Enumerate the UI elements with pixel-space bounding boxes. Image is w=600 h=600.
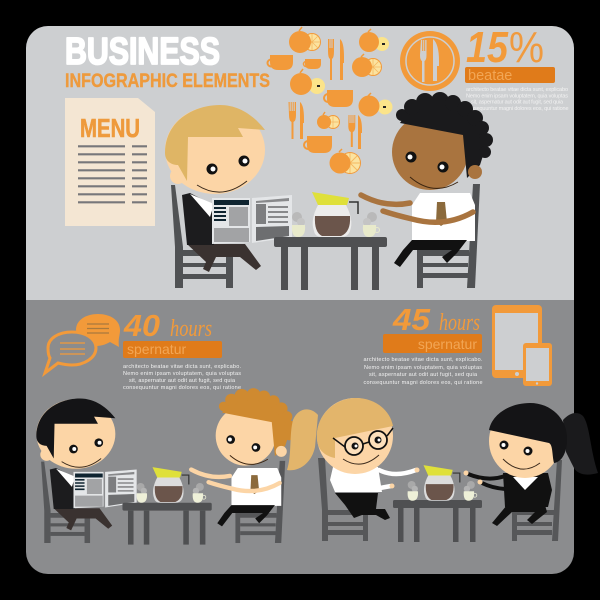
newspaper: bottom (73, 470, 137, 508)
text block: bottom left (123, 364, 241, 391)
menu card (65, 98, 155, 226)
table: bottom right (393, 500, 482, 542)
food icons group (268, 27, 392, 174)
stat: 15%: % (509, 23, 544, 72)
text block: bottom right: sit, aspernatur aut odit aut fugit, sed quia (369, 372, 478, 378)
stat: 15% (466, 23, 544, 72)
text block: top: Nemo enim ipsam voluptatem, quia voluptas (466, 94, 568, 100)
bar: beatae: beatae (468, 68, 512, 84)
text block: bottom right: Nemo enim ipsam voluptatem, quia voluptas (364, 365, 482, 371)
character: dark-haired man reading (36, 398, 115, 543)
text block: top: consequuntur magni dolores eos, qui ratione (466, 106, 568, 112)
icon: plate with cutlery (400, 31, 460, 91)
text block: bottom right: architecto beatae vitae dicta sunt, explicabo. (364, 357, 483, 363)
text block: bottom left: Nemo enim ipsam voluptatem, quia voluptas (123, 371, 241, 377)
bar: spernatur right (383, 334, 482, 353)
text block: top (466, 87, 568, 112)
stat: 45 hours: 45 (392, 302, 431, 337)
panel: bottom section (26, 300, 574, 574)
icon: speech bubbles (45, 314, 120, 373)
subtitle: INFOGRAPHIC ELEMENTS (65, 71, 270, 92)
stat: 45 hours (392, 302, 480, 337)
stat: 40 hours (123, 308, 212, 343)
coffee pot and cups: bottom left (137, 467, 206, 503)
character: ginger curly-haired man (191, 388, 295, 543)
text block: top: architecto beatae vitae dicta sunt, explicabo (466, 87, 568, 93)
menu card: MENU (80, 113, 140, 143)
stat: 45 hours: hours (439, 310, 480, 336)
character: blond man reading (165, 105, 265, 288)
stat: 15%: 15 (466, 23, 508, 72)
title: BUSINESS (65, 31, 220, 73)
newspaper: top (212, 195, 292, 244)
coffee cups: top (292, 212, 380, 237)
panel: top section (26, 26, 574, 300)
coffee pot and cups: bottom right (408, 465, 477, 501)
bar: spernatur left (123, 341, 222, 358)
icon: tablet devices (492, 305, 552, 386)
stat: 40 hours: hours (170, 316, 212, 342)
character: blonde woman with glasses (287, 398, 420, 541)
text block: top: sit, aspernatur aut odit aut fugit, sed quia (471, 100, 564, 106)
table: top (274, 237, 387, 290)
text block: bottom left: sit, aspernatur aut odit aut fugit, sed quia (129, 378, 236, 384)
table: bottom left (122, 503, 212, 545)
bar: beatae (465, 67, 555, 84)
text block: bottom right: consequuntur magni dolores eos, qui ratione (364, 380, 482, 386)
character: curly-haired man (361, 92, 493, 288)
text block: bottom left: architecto beatae vitae dicta sunt, explicabo. (123, 364, 241, 370)
text block: bottom right (364, 357, 483, 386)
bar: spernatur left: spernatur (127, 341, 186, 357)
coffee pot: top (312, 192, 358, 237)
bar: spernatur right: spernatur (418, 336, 477, 352)
text block: bottom left: consequuntur magni dolores eos, qui ratione (123, 385, 241, 391)
character: dark-haired woman with ponytail (464, 403, 598, 541)
stat: 40 hours: 40 (123, 308, 160, 343)
